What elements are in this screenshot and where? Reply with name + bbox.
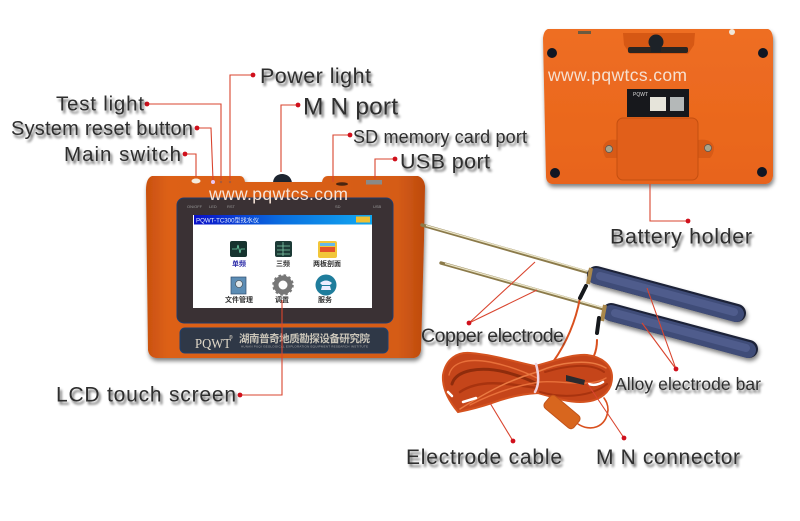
icon: three channel <box>275 241 292 257</box>
screen title bar <box>194 215 372 224</box>
brand text <box>195 332 370 352</box>
callout: M N port: M N port <box>303 94 398 120</box>
callout: Electrode cable: Electrode cable <box>406 446 562 469</box>
front bezel <box>177 198 393 323</box>
back case <box>543 29 773 184</box>
callout: USB port: USB port <box>400 150 490 174</box>
electrode cable coil <box>443 286 612 430</box>
device: back view <box>543 29 773 184</box>
coil strands <box>449 361 537 378</box>
LCD touch screen: 两板剖面 <box>313 259 341 268</box>
info plate <box>627 89 689 117</box>
LCD touch screen <box>193 215 372 308</box>
callout: Electrode cable <box>406 403 562 469</box>
alloy bar 2 <box>602 305 749 350</box>
orange case <box>146 176 425 358</box>
callout: M N connector: M N connector <box>596 446 740 469</box>
callout: Battery holder <box>610 184 752 248</box>
alloy bar 1 <box>588 268 737 314</box>
screw holes <box>547 48 768 178</box>
callout: M N connector <box>587 383 740 469</box>
callout: Alloy electrode bar <box>615 288 761 394</box>
bezel port labels: SD <box>335 204 341 209</box>
callout: Copper electrode: Copper electrode <box>421 325 564 347</box>
brand plate <box>180 328 388 353</box>
brand text: PQWT <box>195 337 231 352</box>
MN port knob <box>273 174 292 183</box>
black connector <box>566 375 585 385</box>
coil gaps <box>448 392 476 402</box>
callout: System reset button: System reset button <box>11 118 193 140</box>
callout: Main switch <box>64 143 196 177</box>
brand text: HUNAN PUQI GEOLOGICAL EXPLORATION EQUIPMENT RESEARCH INSTITUTE <box>241 344 368 348</box>
watermark back: www.pqwtcs.com <box>547 65 687 85</box>
LCD touch screen: 文件管理 <box>225 295 253 304</box>
copper electrode 1 <box>422 225 590 273</box>
bezel port labels: USB <box>373 204 382 209</box>
copper electrode 2 <box>441 263 604 309</box>
callout: USB port <box>375 150 490 179</box>
battery cover <box>603 118 714 180</box>
callout: Alloy electrode bar: Alloy electrode bar <box>615 374 761 394</box>
top port row <box>192 178 382 186</box>
icon: profile <box>318 241 337 258</box>
device: front view <box>146 174 425 358</box>
callout: SD memory card port <box>333 127 527 182</box>
icon: file manager <box>231 277 246 294</box>
icon: gear <box>276 278 290 292</box>
LCD touch screen: PQWT-TC300型找水仪 <box>196 216 259 224</box>
lead wires <box>553 298 580 362</box>
bezel port labels: RST <box>227 204 236 209</box>
icon: single channel <box>230 241 247 257</box>
tie <box>535 364 538 392</box>
LCD touch screen: 单频 <box>232 259 246 268</box>
callout: LCD touch screen: LCD touch screen <box>56 384 236 406</box>
callout: LCD touch screen <box>56 300 282 406</box>
callout: Power light: Power light <box>260 64 371 88</box>
callout: Test light: Test light <box>56 92 144 116</box>
watermark front: www.pqwtcs.com <box>208 184 348 204</box>
callout: Power light <box>230 64 371 180</box>
callout: Copper electrode <box>421 262 564 347</box>
callout: System reset button <box>11 118 213 180</box>
top notch with knob <box>578 29 735 54</box>
callout: M N port <box>281 94 398 172</box>
bezel port labels: ON/OFF <box>187 204 203 209</box>
coil silhouette <box>443 353 612 412</box>
brand text: ® <box>229 334 233 341</box>
MN connector plug <box>542 394 582 430</box>
icon: phone <box>316 274 336 296</box>
callout: Test light <box>56 92 221 180</box>
electrodes <box>422 225 749 350</box>
loop to connector <box>578 398 608 428</box>
info plate: PQWT <box>633 92 648 98</box>
bezel port labels <box>187 204 382 209</box>
bezel port labels: LED <box>209 204 217 209</box>
brand text: 湖南普奇地质勘探设备研究院 <box>239 332 370 345</box>
callout: Battery holder: Battery holder <box>610 224 752 248</box>
LCD touch screen: 服务 <box>318 295 332 304</box>
LCD touch screen: 三频 <box>276 259 290 268</box>
callout: SD memory card port: SD memory card port <box>353 127 527 147</box>
callout: Main switch: Main switch <box>64 143 181 166</box>
LCD touch screen: 调置 <box>275 295 289 304</box>
